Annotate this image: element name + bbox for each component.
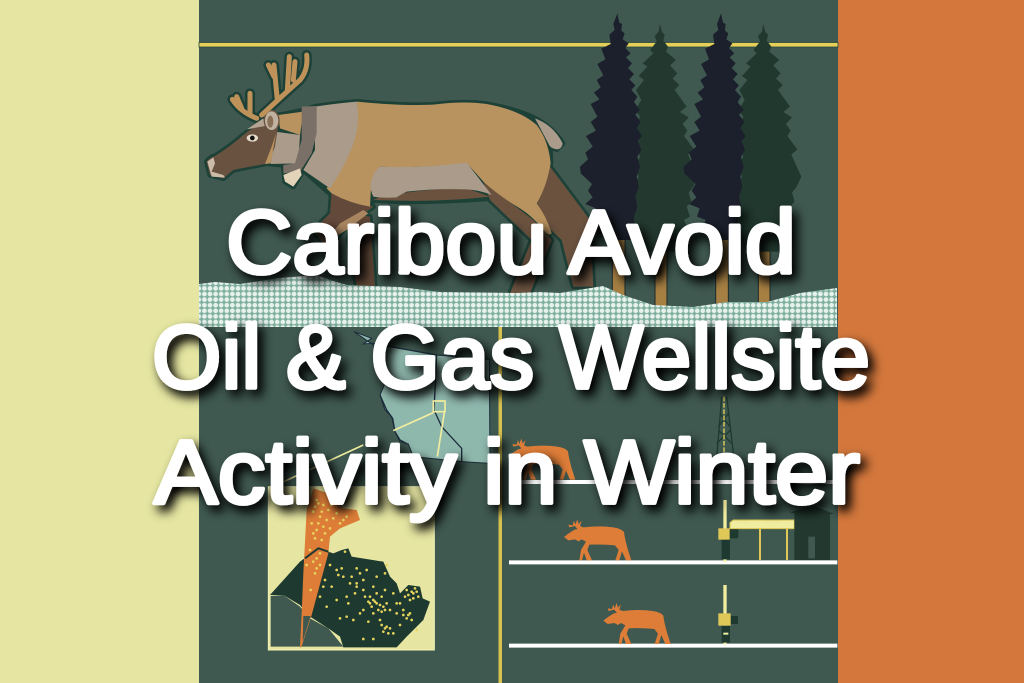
tree 3 [684,13,746,240]
wellsite dots [307,500,418,639]
trees [580,13,801,307]
boundary lines [372,343,462,462]
well fittings [722,616,738,643]
caribou illustration [207,55,593,293]
pipe rack [730,520,794,529]
rack legs [760,529,787,560]
shoulder patch [303,102,358,188]
title line 3: Activity in Winter [154,423,860,523]
far fore leg [348,213,375,287]
building door [808,537,815,558]
tree 4 [734,24,801,252]
well box [718,613,731,626]
province map [354,332,490,463]
belly shadow [373,188,490,201]
body [327,102,552,234]
capped well [718,585,738,644]
title [152,193,870,523]
inset background [268,487,434,650]
neck tan [278,112,303,135]
wellsite activity scenes [508,397,837,646]
valve box [718,528,730,540]
caribou outline [232,55,307,118]
neck grey [271,132,300,164]
torn snow band [199,275,837,327]
sector notch [303,616,311,642]
head [207,123,278,178]
near fore leg [313,192,373,248]
tree trunks [612,238,770,307]
eye [247,134,258,142]
location map group [268,332,490,650]
title line 2: Oil & Gas Wellsite [152,308,870,408]
antlers [232,55,307,118]
title line 1: Caribou Avoid [226,193,796,293]
vertical yellow divider [498,327,502,683]
near hind leg [483,182,552,293]
tree 2 [631,24,698,252]
dark study region [270,548,430,647]
well pipe [723,585,727,644]
left colour column [0,0,199,683]
far hind leg [533,167,593,287]
ground lines [509,482,837,646]
muzzle [207,157,225,178]
right colour column [838,0,1024,683]
ridge line [305,548,328,558]
background panel: central green [199,0,838,683]
horizontal yellow rule [199,42,838,47]
production equipment [718,500,834,562]
well highlight [723,633,728,635]
drilling derrick [713,397,737,458]
building [790,505,834,560]
cheek tan [265,133,276,164]
face stripe [247,118,265,129]
locator box and leader lines [280,401,445,483]
collar [283,106,317,173]
caribou bottom [603,603,671,644]
collar tag [283,168,302,187]
caribou middle [564,519,631,560]
wellhead pipe [723,500,727,562]
grey-green area [271,595,343,647]
belly patch [371,163,492,198]
orange sector [300,488,360,647]
valve fittings [722,528,738,559]
fore leg highlight [323,210,368,243]
ear [264,111,279,131]
tree 1 [580,13,642,240]
inset map [268,487,434,650]
tail [535,118,563,149]
caribou top [508,439,575,480]
